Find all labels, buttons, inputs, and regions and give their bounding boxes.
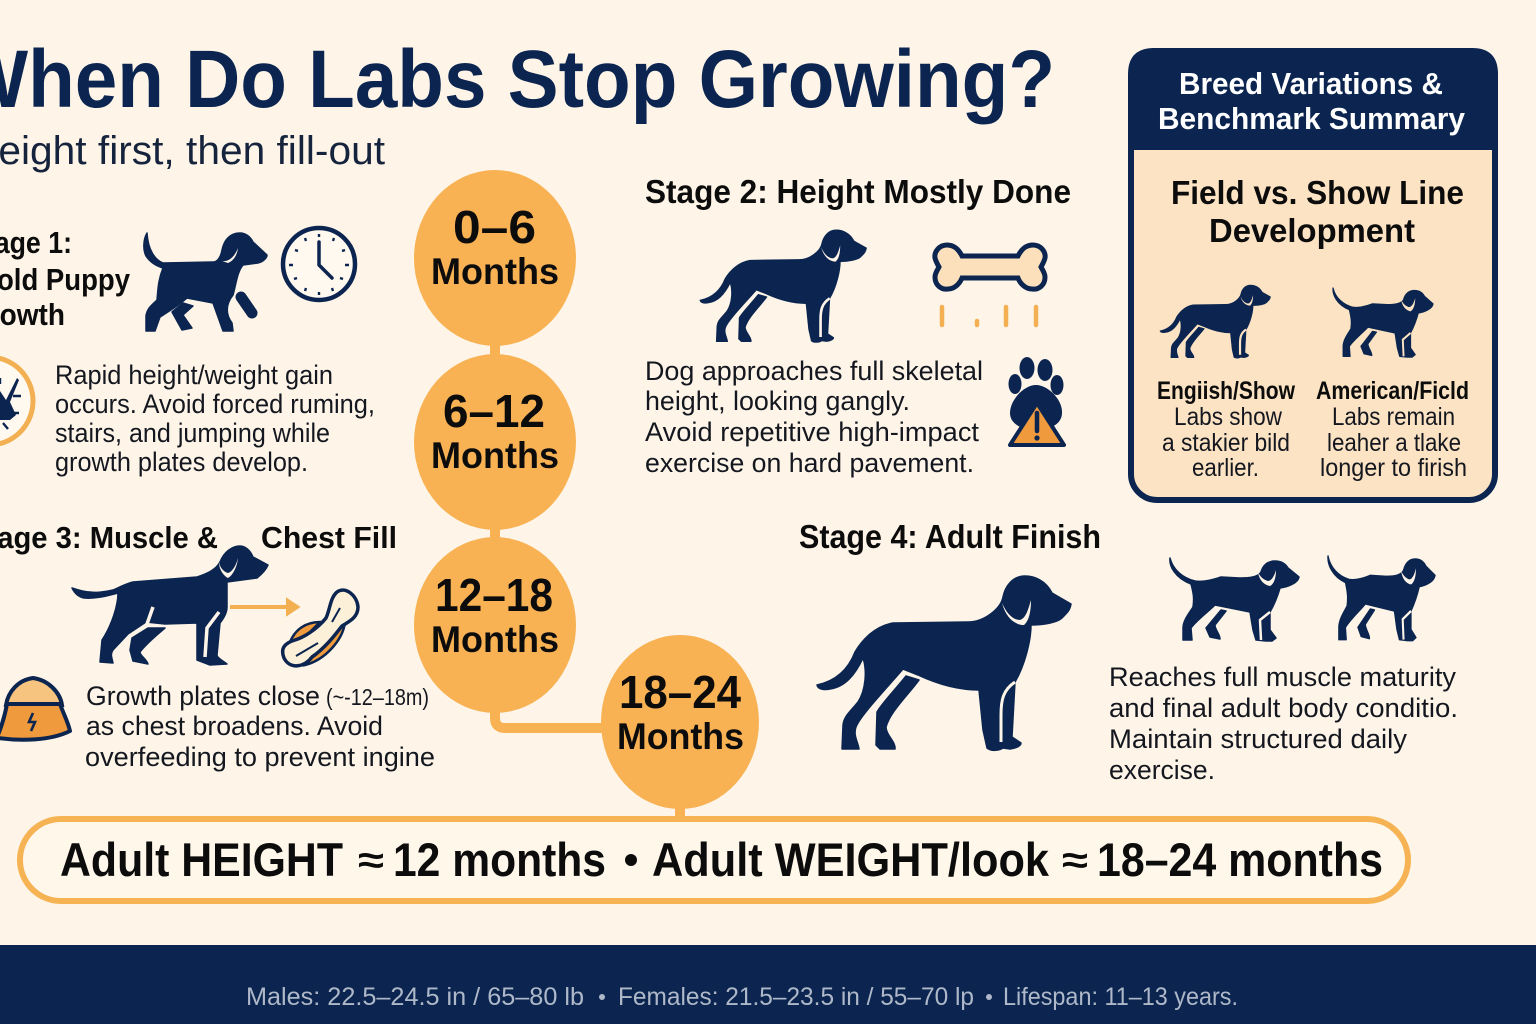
stage 4 body text: exercise. bbox=[1109, 755, 1215, 785]
text: english show: earlier. bbox=[1192, 454, 1259, 482]
icon: bone with ticks bbox=[935, 245, 1045, 325]
stage 1 body text: occurs. Avoid forced ruming, bbox=[55, 389, 375, 419]
text: english show: a stakier bild bbox=[1162, 429, 1290, 457]
stage 3 body text: as chest broadens. Avoid bbox=[86, 711, 383, 741]
icon: puppy bbox=[144, 233, 267, 331]
stage 4 body text: Reaches full muscle maturity bbox=[1109, 662, 1456, 692]
text: american field bbox=[1316, 377, 1469, 482]
stage 1 body text: stairs, and jumping while bbox=[55, 418, 330, 448]
stage 3 body text bbox=[85, 681, 435, 772]
panel: stage 2 bbox=[645, 173, 1071, 478]
stage 4 body text: Maintain structured daily bbox=[1109, 724, 1408, 754]
milestone: 6-12 months: Months bbox=[431, 435, 559, 476]
timeline bbox=[414, 170, 759, 822]
stage 2 body text: exercise on hard pavement. bbox=[645, 448, 974, 478]
timeline connectors bbox=[495, 335, 680, 822]
icon: food bowl bbox=[0, 678, 70, 740]
footer bar: Lifespan: 11–13 years. bbox=[1003, 983, 1238, 1011]
summary pill: Adult HEIGHT bbox=[60, 833, 343, 886]
summary pill bbox=[20, 819, 1408, 901]
text: english show bbox=[1157, 377, 1295, 482]
milestone: 18-24 months bbox=[601, 635, 759, 809]
footer bar: Females: 21.5–23.5 in / 55–70 lp bbox=[618, 983, 974, 1011]
panel: breed variations bbox=[1128, 48, 1498, 500]
summary pill: ≈ bbox=[358, 840, 384, 882]
icon: adult dog bbox=[817, 576, 1071, 750]
milestone: 12-18 months: 12–18 bbox=[435, 569, 553, 621]
panel subheading: Development bbox=[1209, 212, 1415, 249]
stage 1 body text bbox=[55, 360, 375, 477]
text: english show: Engiish/Show bbox=[1157, 377, 1295, 405]
milestone: 6-12 months: 6–12 bbox=[443, 385, 545, 437]
icon: adult dog small right bbox=[1328, 556, 1435, 641]
milestone: 12-18 months: Months bbox=[431, 619, 559, 660]
stage 3 body text: overfeeding to prevent ingine bbox=[85, 742, 435, 772]
stage 2 body text: Dog approaches full skeletal bbox=[645, 356, 983, 386]
stage 4 heading: Stage 4: Adult Finish bbox=[799, 518, 1101, 555]
milestone: 0-6 months: Months bbox=[431, 251, 559, 292]
milestone: 0-6 months: 0–6 bbox=[453, 201, 536, 253]
stage 1 body text: growth plates develop. bbox=[55, 447, 308, 477]
footer bar: Males: 22.5–24.5 in / 65–80 lb bbox=[246, 983, 584, 1011]
stage 2 heading: Stage 2: Height Mostly Done bbox=[645, 173, 1071, 210]
stage 1 body text: Rapid height/weight gain bbox=[55, 360, 333, 390]
icon: no running bbox=[0, 357, 33, 445]
summary pill: 18–24 months bbox=[1097, 833, 1383, 886]
text: american field: longer to firish bbox=[1320, 454, 1467, 482]
panel header: Benchmark Summary bbox=[1158, 101, 1466, 136]
stage 2 body text: Avoid repetitive high-impact bbox=[645, 417, 980, 447]
stage 3 heading bbox=[0, 520, 397, 555]
text: american field: leaher a tlake bbox=[1327, 429, 1461, 457]
milestone: 6-12 months bbox=[414, 354, 576, 530]
milestone: 12-18 months bbox=[414, 537, 576, 713]
arrow: growth to chest bbox=[230, 601, 297, 613]
panel: stage 3 bbox=[0, 520, 435, 772]
stage 4 body text bbox=[1109, 662, 1458, 785]
summary pill: ≈ bbox=[1062, 840, 1088, 882]
icon: filling-out dog bbox=[72, 546, 268, 665]
panel frame bbox=[1131, 51, 1495, 500]
text: american field: American/Ficld bbox=[1316, 377, 1469, 405]
icon: paw warning bbox=[1008, 357, 1064, 445]
stage 4 body text: and final adult body conditio. bbox=[1109, 693, 1458, 723]
stage 1 heading bbox=[0, 225, 131, 332]
icon: chest bone bbox=[283, 590, 358, 666]
icon: lanky dog bbox=[700, 230, 866, 342]
panel subheading bbox=[1171, 174, 1464, 249]
panel header: Breed Variations & bbox=[1179, 66, 1443, 101]
panel subheading: Field vs. Show Line bbox=[1171, 174, 1464, 211]
stage 2 body text: height, looking gangly. bbox=[645, 386, 910, 416]
summary pill: 12 months bbox=[393, 833, 606, 886]
icon: adult dog small left bbox=[1170, 558, 1299, 641]
icon: english show lab bbox=[1160, 285, 1270, 358]
summary pill: Adult WEIGHT/look bbox=[652, 833, 1050, 886]
milestone: 0-6 months bbox=[414, 170, 576, 346]
milestone: 18-24 months: 18–24 bbox=[619, 666, 741, 718]
stage 3 heading: Chest Fill bbox=[261, 520, 397, 555]
icon: clock bbox=[283, 228, 355, 300]
milestone: 18-24 months: Months bbox=[617, 716, 744, 757]
footer bar bbox=[0, 945, 1536, 1024]
icon: american field lab bbox=[1333, 288, 1433, 357]
stage 2 body text bbox=[645, 356, 983, 478]
stage 3 body text: (~-12–18m) bbox=[326, 684, 429, 710]
panel header bbox=[1128, 48, 1498, 150]
stage 1 heading: old Puppy bbox=[0, 262, 131, 297]
panel: stage 1 bbox=[0, 225, 375, 477]
panel: stage 4 bbox=[799, 518, 1458, 785]
text: english show: Labs show bbox=[1174, 403, 1283, 431]
text: american field: Labs remain bbox=[1332, 403, 1455, 431]
stage 3 body text: Growth plates close bbox=[86, 681, 320, 711]
